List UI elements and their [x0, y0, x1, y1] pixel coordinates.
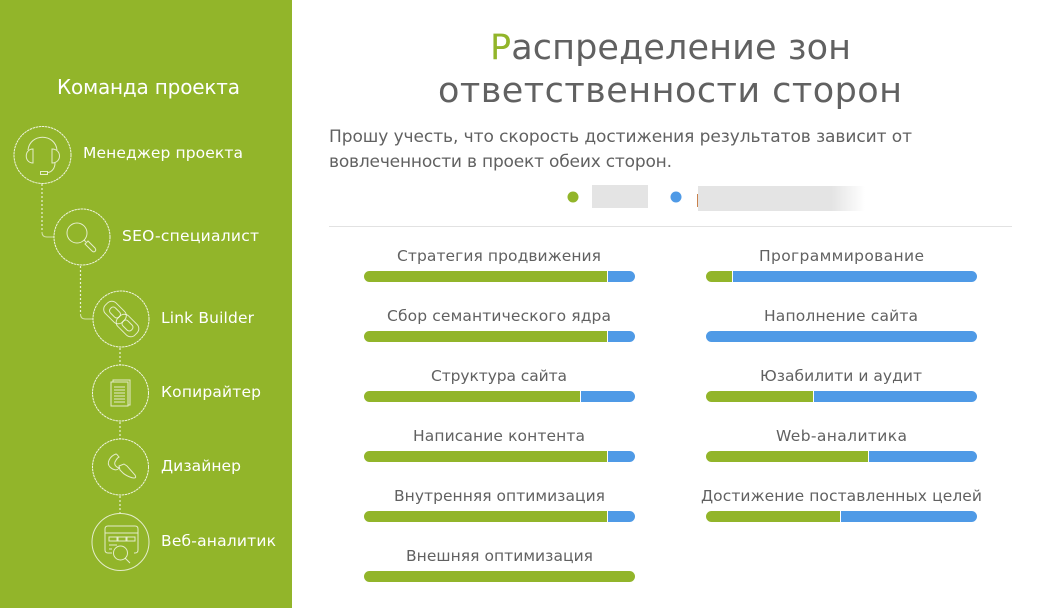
bar: usability and audit: Юзабилити и аудит	[760, 367, 922, 385]
bar: strategy	[364, 247, 635, 282]
connector: manager to SEO	[42, 184, 54, 237]
team member: copywriter	[92, 365, 261, 421]
team member: designer	[92, 439, 241, 495]
bar: programming: Программирование	[759, 247, 924, 265]
bar: semantic core	[364, 307, 635, 342]
connector: copywriter to designer	[119, 422, 121, 439]
bar: web analytics	[706, 427, 977, 462]
bar: usability and audit	[706, 367, 977, 402]
connector: designer to analyst	[119, 496, 121, 513]
bar: web analytics: Web-аналитика	[776, 427, 907, 445]
intro text: Прошу учесть, что скорость достижения результатов зависит от	[329, 127, 912, 147]
team member: SEO	[54, 209, 259, 265]
bar: content writing	[364, 427, 635, 462]
title	[438, 28, 902, 111]
bar: internal optimization	[364, 487, 635, 522]
team member: web analyst	[92, 514, 276, 570]
connector: SEO to link builder	[80, 266, 92, 319]
team member: manager: Менеджер проекта	[83, 144, 243, 162]
bar: strategy: Стратегия продвижения	[397, 247, 601, 265]
panel: project team	[0, 0, 292, 608]
bar: content writing: Написание контента	[413, 427, 585, 445]
bar: programming	[706, 247, 977, 282]
title: ответственности сторон	[438, 71, 902, 111]
bar: achieving goals	[701, 487, 982, 522]
team member: manager	[14, 126, 243, 184]
team member: copywriter: Копирайтер	[161, 383, 261, 401]
team member: SEO: SEO-специалист	[122, 227, 259, 245]
connector: link builder to copywriter	[119, 348, 121, 365]
intro text: вовлеченности в проект обеих сторон.	[329, 152, 672, 172]
intro text	[329, 127, 912, 172]
title: Распределение зон	[490, 28, 851, 68]
team member: link builder	[93, 291, 255, 347]
bar: site structure: Структура сайта	[431, 367, 567, 385]
bar: external optimization	[364, 547, 635, 582]
team member: link builder: Link Builder	[161, 309, 255, 327]
bar: site content: Наполнение сайта	[764, 307, 918, 325]
bars: left column	[364, 247, 635, 582]
bar: site structure	[364, 367, 635, 402]
bar: external optimization: Внешняя оптимизация	[406, 547, 593, 565]
bar: achieving goals: Достижение поставленных целей	[701, 487, 982, 505]
team member: designer: Дизайнер	[161, 457, 241, 475]
legend	[568, 185, 865, 211]
bar: site content	[706, 307, 977, 342]
bars: right column	[701, 247, 982, 522]
bar: semantic core: Сбор семантического ядра	[387, 307, 611, 325]
heading: project team: Команда проекта	[57, 75, 240, 99]
bar: internal optimization: Внутренняя оптимизация	[394, 487, 605, 505]
team member: web analyst: Веб-аналитик	[161, 532, 276, 550]
